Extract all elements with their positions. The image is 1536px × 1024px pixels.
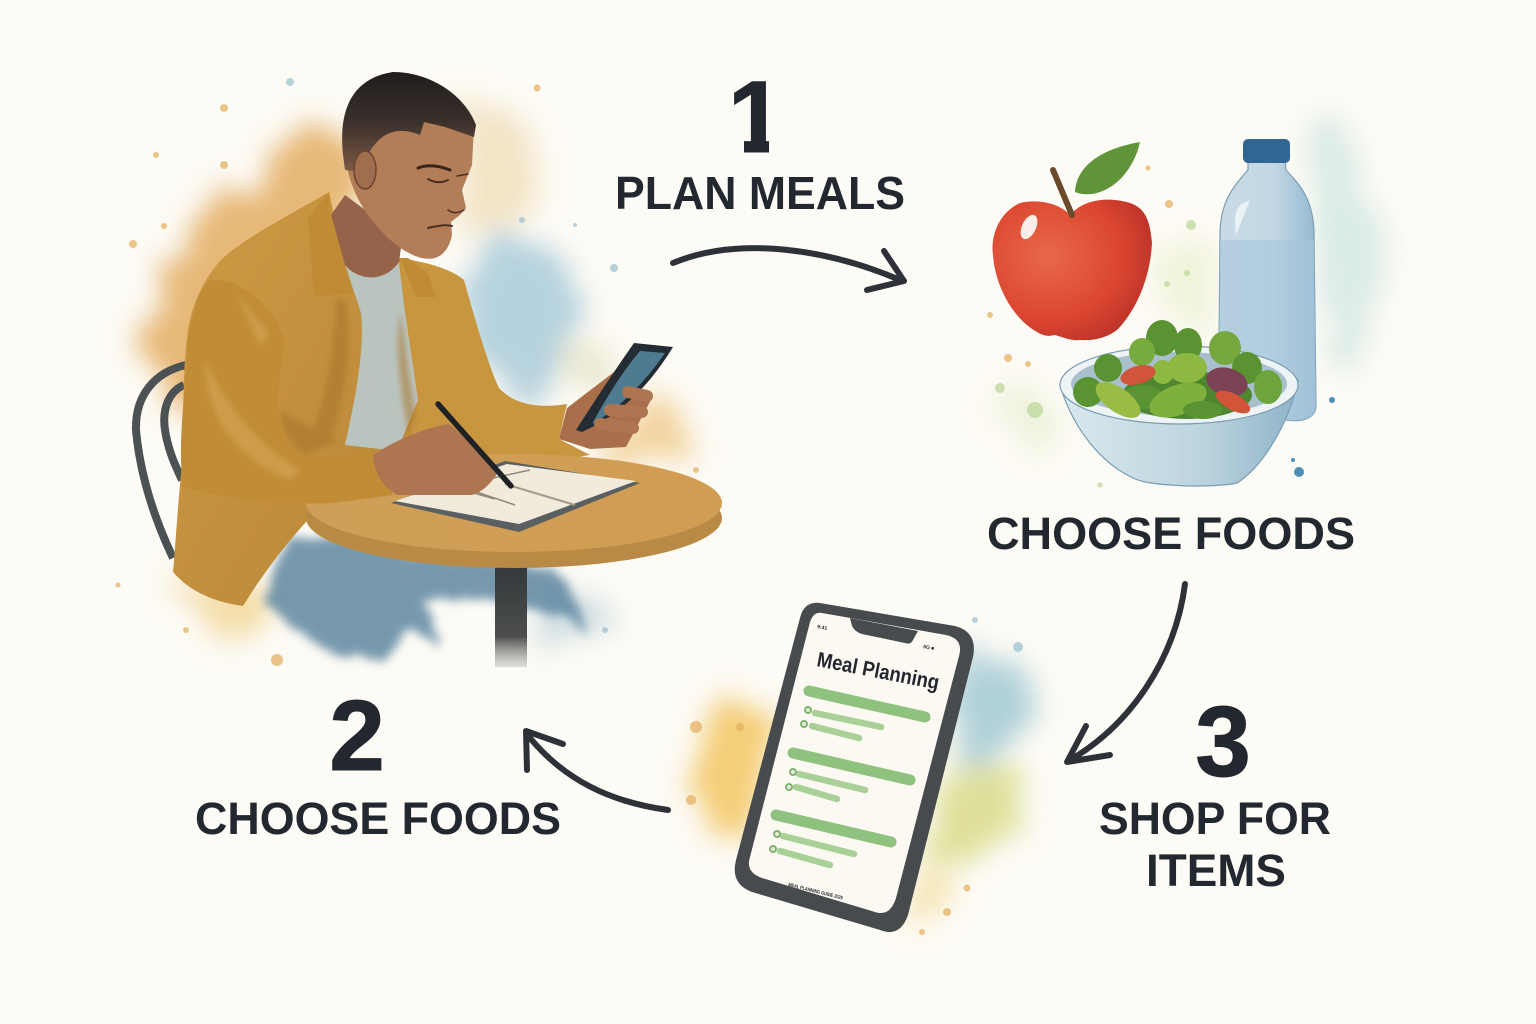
illustration: food group (992, 139, 1316, 486)
phone title: Meal Planning (815, 648, 941, 695)
icon: fingers (600, 392, 647, 428)
icon: round table (306, 454, 722, 568)
phone notch (850, 618, 918, 644)
icon: facial features (418, 166, 468, 228)
icon: trousers (262, 534, 586, 660)
step 1 label: PLAN MEALS (615, 167, 905, 219)
step label: choose foods top: CHOOSE FOODS (987, 508, 1355, 559)
icon: table leg (495, 565, 527, 667)
icon: collar (308, 192, 436, 313)
icon: writing hand (373, 424, 499, 495)
icon: jacket fold shading (214, 300, 416, 455)
phone status text (817, 624, 935, 652)
arrow: foods to shop (1067, 584, 1185, 762)
watercolor wash: phone (695, 640, 1035, 919)
phone status text: 9:41 (817, 624, 828, 632)
icon: ear (354, 151, 376, 189)
illustration: phone with meal plan (735, 603, 974, 932)
arrow: phone to choose foods (526, 731, 668, 810)
watercolor splatter dots (116, 78, 1335, 935)
step 2 label: CHOOSE FOODS (195, 793, 561, 844)
watercolor wash: food (1000, 118, 1382, 455)
phone footer: MEAL PLANNING GUIDE 2025 (788, 882, 843, 902)
icon: notebook (391, 461, 640, 532)
step 1 number: 1 (728, 60, 784, 174)
icon: sleeve fold shading (205, 290, 300, 480)
phone screen (749, 613, 960, 913)
step 2 number: 2 (329, 680, 385, 792)
icon: neck (331, 195, 402, 277)
step 3 label: SHOP FOR (1099, 793, 1331, 844)
phone list bars (770, 691, 925, 865)
step 3 label (1099, 793, 1331, 896)
icon: pen (438, 404, 511, 486)
step 3 number: 3 (1195, 686, 1251, 798)
step 3 label: ITEMS (1146, 845, 1286, 896)
icon: t-shirt (345, 262, 418, 451)
watercolor wash: person (144, 100, 694, 640)
phone body (735, 603, 974, 932)
icon: apple (992, 142, 1152, 340)
icon: jacket body (173, 192, 420, 606)
phone status text: 5G ■ (923, 644, 935, 652)
icon: chair (136, 365, 186, 558)
icon: jacket right arm (400, 258, 590, 461)
icon: left sleeve (181, 280, 393, 503)
illustration: person at table (136, 72, 722, 667)
icon: phone in hand (576, 343, 673, 432)
icon: hair (342, 72, 476, 172)
arrow: plan to foods (673, 248, 904, 290)
icon: holding hand (559, 372, 653, 449)
icon: salad bowl (1060, 320, 1298, 486)
icon: face (343, 111, 474, 259)
icon: water bottle (1219, 139, 1316, 421)
